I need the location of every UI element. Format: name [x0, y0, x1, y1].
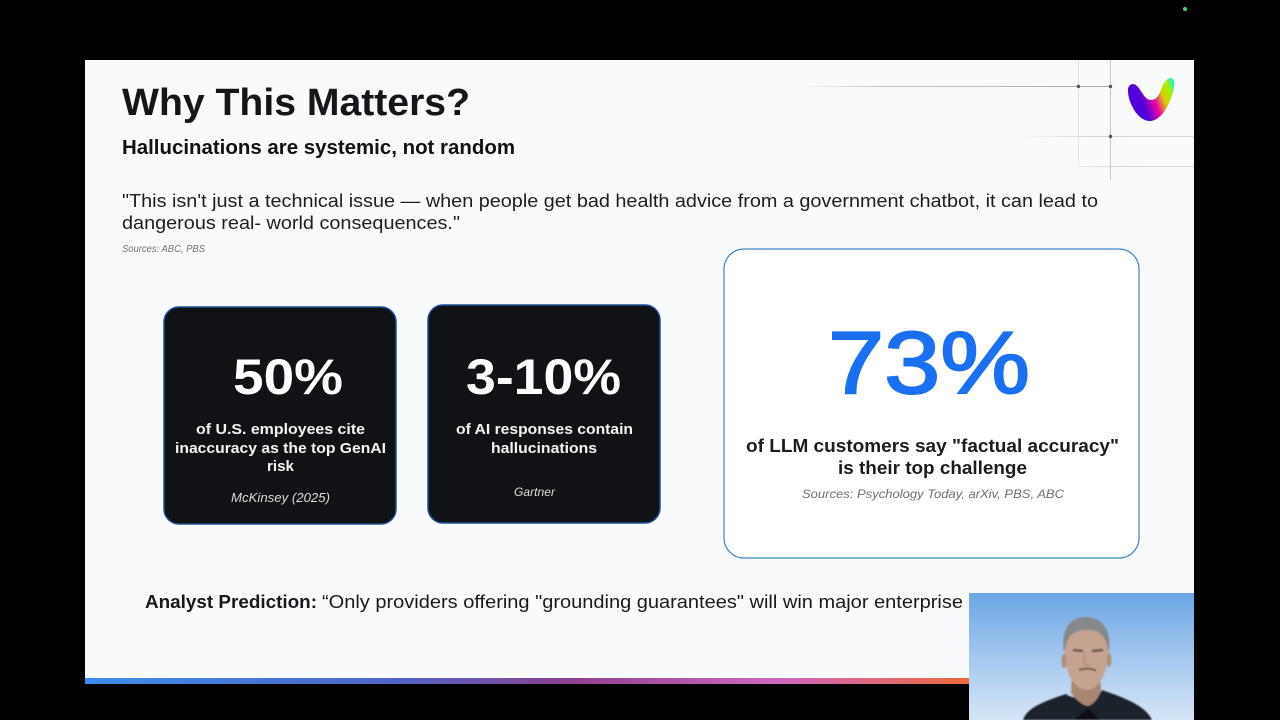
- stat description: of U.S. employees cite: [196, 421, 365, 438]
- stat number 3-10%: 3-10%: [466, 349, 621, 405]
- subtitle: Hallucinations are systemic, not random: [122, 137, 515, 159]
- panel: 50% stat: [164, 307, 396, 524]
- stat source: Sources: Psychology Today, arXiv, PBS, ABC: [802, 487, 1064, 501]
- stat number 73%: 73%: [828, 313, 1030, 412]
- stat number 50%: 50%: [233, 349, 343, 405]
- icon: rainbow V logo: [1128, 78, 1174, 121]
- panel: 73% stat: [724, 249, 1139, 558]
- quote: "This isn't just a technical issue — when people get bad health advice from a government chatbot, it can lead to: [122, 191, 1098, 211]
- stat description: [746, 436, 1119, 478]
- stat description: risk: [267, 458, 295, 475]
- presenter video: [969, 593, 1194, 720]
- stat description: of LLM customers say "factual accuracy": [746, 436, 1119, 456]
- quote sources: Sources: ABC, PBS: [122, 244, 205, 255]
- stat source: Gartner: [514, 485, 556, 499]
- title: Why This Matters?: [122, 82, 470, 124]
- stat description: [175, 421, 386, 475]
- stat description: is their top challenge: [838, 458, 1027, 478]
- stat description: inaccuracy as the top GenAI: [175, 440, 386, 457]
- slide background: [85, 60, 1194, 679]
- panel: 3-10% stat: [428, 305, 660, 523]
- stat description: hallucinations: [491, 440, 597, 457]
- stat source: McKinsey (2025): [231, 490, 330, 505]
- quote: dangerous real- world consequences.": [122, 213, 460, 233]
- bottom gradient bar: [85, 678, 969, 684]
- analyst prediction: “Only providers offering "grounding guarantees" will win major enterprise: [322, 592, 963, 612]
- recording indicator dot: [1183, 7, 1187, 11]
- analyst prediction: Analyst Prediction:: [145, 592, 317, 612]
- stat description: [456, 421, 633, 457]
- stat description: of AI responses contain: [456, 421, 633, 438]
- quote: [122, 191, 1098, 233]
